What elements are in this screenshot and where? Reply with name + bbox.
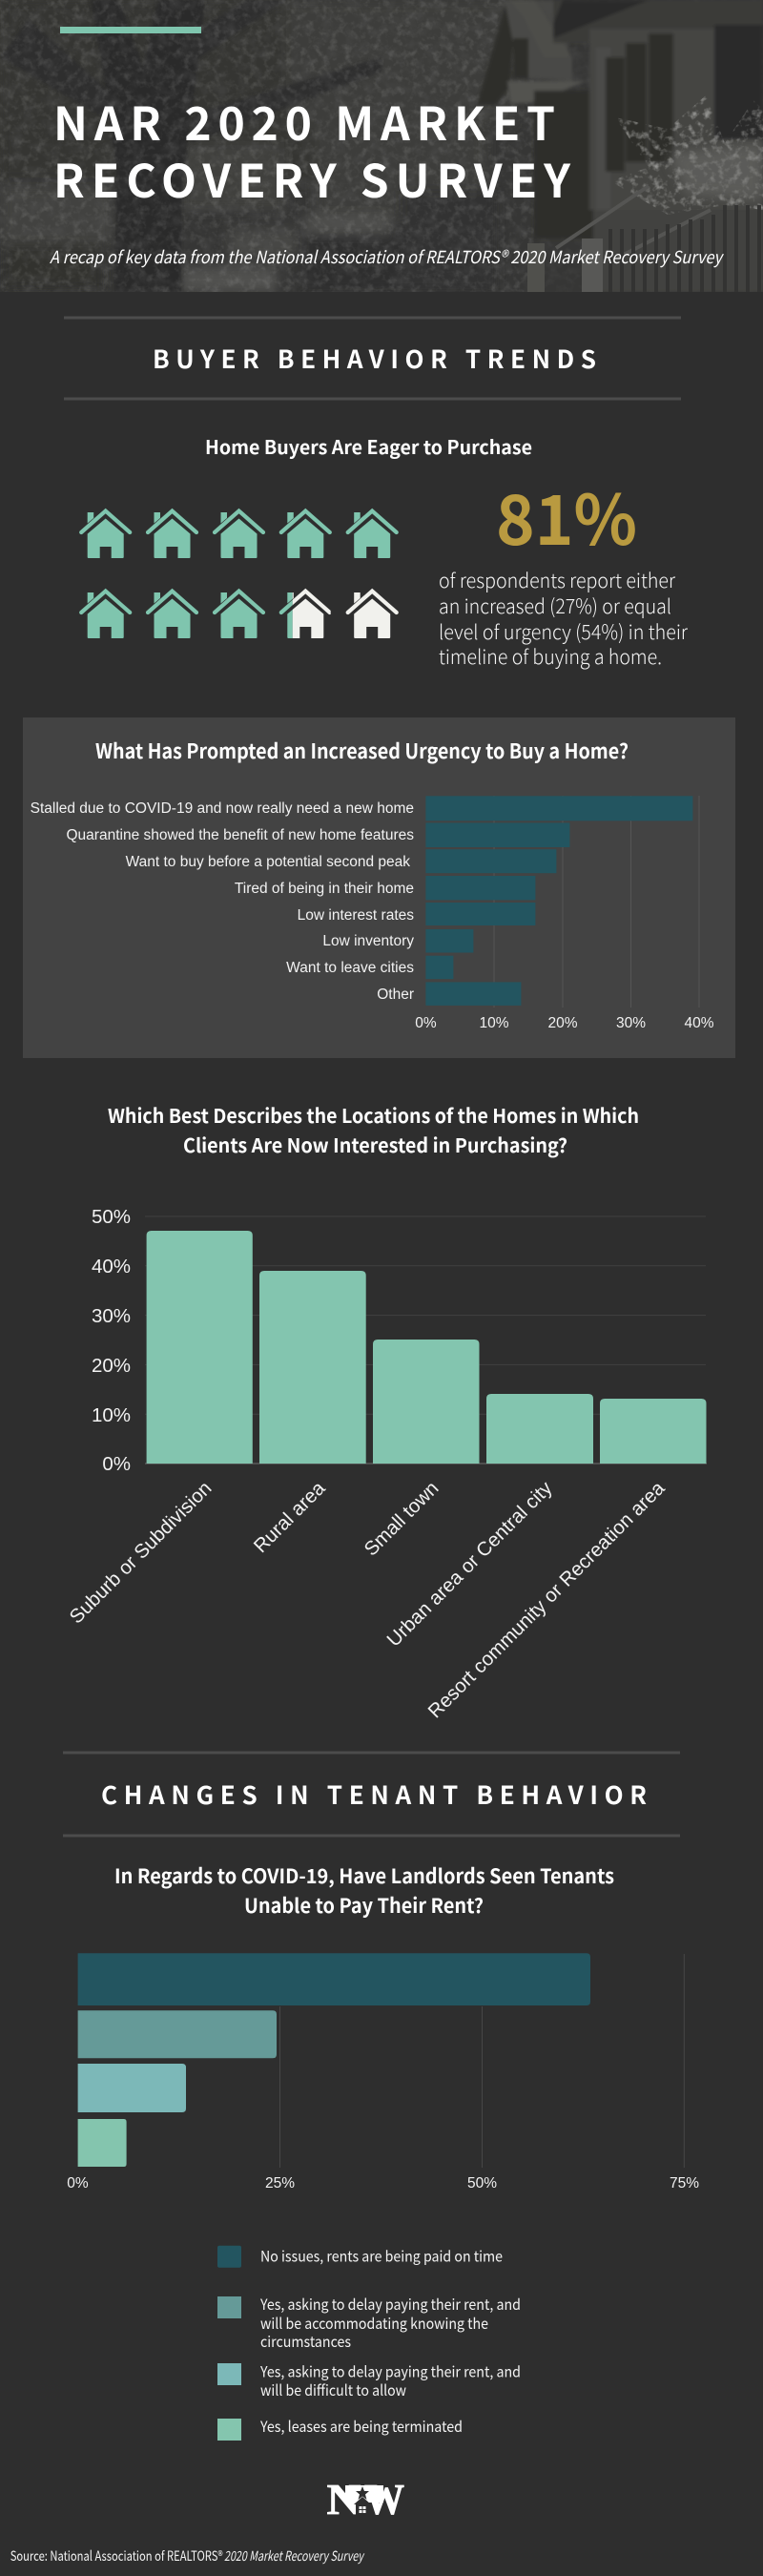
accent bar: [60, 27, 201, 33]
column chart: locations: [65, 1206, 707, 1722]
stat description: timeline of buying a home.: [439, 642, 662, 671]
horizontal bar chart: [31, 796, 714, 1031]
legend: Yes, asking to delay paying their rent, and: [259, 2360, 521, 2381]
category labels: Low inventory: [322, 933, 414, 949]
y axis labels: 0%: [102, 1453, 131, 1475]
axis labels: 30%: [616, 1015, 646, 1031]
legend: Yes, asking to delay paying their rent, and: [259, 2294, 521, 2315]
axis labels: [67, 2175, 699, 2192]
bar chart: rent: [67, 1953, 699, 2192]
logo: NW with star and house: W: [364, 2475, 404, 2524]
legend: [217, 2246, 521, 2441]
y axis labels: 30%: [92, 1305, 131, 1327]
y axis labels: 20%: [92, 1355, 131, 1377]
big stat: 81%: 81%: [496, 465, 637, 565]
category labels: Other: [377, 987, 414, 1003]
logo: NW with star and house: N: [326, 2475, 361, 2524]
axis labels: [415, 1015, 714, 1031]
section header: buyer behavior trends: BUYER BEHAVIOR TRENDS: [153, 341, 596, 376]
stat description: of respondents report either: [439, 566, 675, 594]
heading: home buyers: Home Buyers Are Eager to Purchase: [205, 432, 532, 460]
x axis labels: [65, 1477, 670, 1722]
section header: changes in tenant behavior: CHANGES IN TENANT BEHAVIOR: [101, 1776, 647, 1812]
category labels: Want to buy before a potential second peak: [126, 854, 410, 870]
blossom branches: [610, 95, 763, 215]
axis labels: 20%: [547, 1015, 578, 1031]
stat description: level of urgency (54%) in their: [439, 617, 688, 646]
axis labels: 25%: [265, 2175, 295, 2192]
x axis labels: Urban area or Central city: [382, 1477, 557, 1652]
axis labels: 0%: [67, 2175, 89, 2192]
title: NAR 2020 MARKET: [53, 87, 555, 154]
source note: Source: National Association of REALTORS®: [10, 2546, 223, 2566]
heading: locations: Clients Are Now Interested in Purchasing?: [183, 1130, 567, 1158]
axis labels: 10%: [479, 1015, 509, 1031]
category labels: Want to leave cities: [286, 960, 414, 976]
category labels: Low interest rates: [298, 907, 414, 924]
stair rails and fence: [556, 186, 711, 258]
category labels: Tired of being in their home: [235, 881, 414, 897]
house gable and roof: [477, 0, 763, 292]
axis labels: 0%: [415, 1015, 437, 1031]
heading: tenants unable to pay: In Regards to COVID-19, Have Landlords Seen Tenants: [114, 1861, 614, 1890]
section header: buyer behavior trends: [64, 317, 681, 401]
legend: circumstances: [260, 2331, 351, 2352]
heading: tenants unable to pay: [114, 1861, 614, 1920]
legend: will be difficult to allow: [260, 2379, 407, 2400]
stat description: an increased (27%) or equal: [439, 592, 671, 620]
light foliage speckle: [0, 0, 534, 292]
y axis labels: 50%: [92, 1206, 131, 1228]
legend: will be accommodating knowing the: [260, 2313, 488, 2334]
x axis labels: Suburb or Subdivision: [65, 1477, 217, 1628]
axis labels: 50%: [467, 2175, 497, 2192]
section header: changes in tenant behavior: [63, 1752, 680, 1838]
title: [53, 87, 571, 211]
x axis labels: Small town: [360, 1477, 443, 1560]
legend: No issues, rents are being paid on time: [260, 2246, 503, 2267]
panel: urgency chart: [23, 717, 735, 1058]
logo: NW with star and house: [326, 2475, 404, 2524]
stat description: [439, 566, 688, 671]
heading: locations: Which Best Describes the Locations of the Homes in Which: [108, 1100, 639, 1129]
hero photo: street with trees and house: [0, 0, 763, 292]
x axis labels: Resort community or Recreation area: [423, 1477, 670, 1722]
y axis labels: 40%: [92, 1256, 131, 1278]
heading: tenants unable to pay: Unable to Pay Their Rent?: [244, 1891, 484, 1920]
category labels: Quarantine showed the benefit of new home features: [67, 827, 414, 843]
x axis labels: Rural area: [250, 1477, 330, 1557]
legend: Yes, leases are being terminated: [259, 2416, 463, 2437]
chart title: What Has Prompted an Increased Urgency to Buy a Home?: [95, 736, 629, 765]
y axis labels: 10%: [92, 1404, 131, 1426]
y axis labels: [92, 1206, 131, 1475]
tree trunk: [91, 0, 205, 292]
heading: locations: [108, 1100, 639, 1158]
axis labels: 40%: [684, 1015, 714, 1031]
source note: 2020 Market Recovery Survey: [224, 2546, 365, 2566]
icon row: ten houses, 8.1 filled: [81, 511, 397, 638]
category labels: Stalled due to COVID-19 and now really need a new home: [31, 800, 414, 817]
title: RECOVERY SURVEY: [53, 144, 571, 211]
axis labels: 75%: [670, 2175, 699, 2192]
category labels: [31, 800, 414, 1003]
